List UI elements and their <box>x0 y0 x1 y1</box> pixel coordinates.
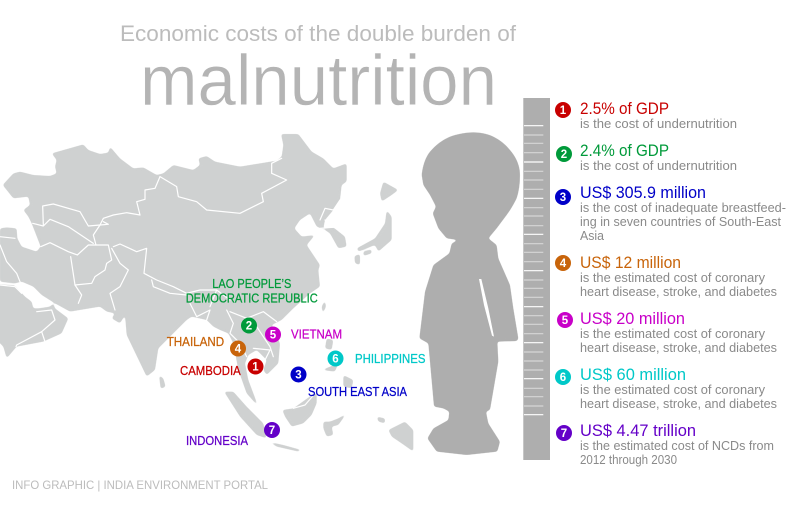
list item 4: US$ 12 million <box>580 254 681 272</box>
map marker 2 <box>241 318 257 334</box>
map label: South East Asia: SOUTH EAST ASIA <box>308 385 408 399</box>
list item 6: US$ 60 million <box>580 366 686 384</box>
map marker 4 <box>230 340 246 356</box>
map marker 7 <box>264 422 280 438</box>
map marker 5 <box>265 326 281 342</box>
main title word: malnutrition <box>140 42 497 121</box>
footer credit: INFO GRAPHIC | INDIA ENVIRONMENT PORTAL <box>12 478 268 492</box>
list item 4: 4 <box>560 258 567 270</box>
list item 1 <box>555 100 737 131</box>
map marker 6 <box>328 350 344 366</box>
list item 6: 6 <box>560 372 566 384</box>
list item 7: US$ 4.47 trillion <box>580 422 696 440</box>
list item 1: is the cost of undernutrition <box>580 117 737 131</box>
map marker 1 <box>248 358 264 374</box>
list item 7: 7 <box>561 428 567 440</box>
list item 3: 3 <box>560 192 566 204</box>
list item 6: is the estimated cost of coronary <box>580 383 766 397</box>
child silhouette <box>419 132 520 455</box>
subtitle line: Economic costs of the double burden of <box>120 21 517 46</box>
list item 5: is the estimated cost of coronary <box>580 327 766 341</box>
list item 3 <box>555 184 786 243</box>
list item 2 <box>556 142 737 173</box>
map marker 3 <box>290 366 306 382</box>
list item 7 <box>556 422 774 467</box>
list item 3: US$ 305.9 million <box>580 184 706 202</box>
list item 5: heart disease, stroke, and diabetes <box>580 341 777 355</box>
map marker 6: 6 <box>332 354 339 366</box>
list item 6: heart disease, stroke, and diabetes <box>580 397 777 411</box>
list item 1: 1 <box>560 105 567 117</box>
map label: Indonesia: INDONESIA <box>186 434 249 448</box>
list item 5: 5 <box>562 315 569 327</box>
list item 5 <box>557 310 777 355</box>
title <box>120 21 517 121</box>
map marker 4: 4 <box>235 344 242 356</box>
map label: Lao <box>186 277 318 306</box>
map label: Lao: DEMOCRATIC REPUBLIC <box>186 292 318 306</box>
list item 2: 2 <box>561 149 567 161</box>
list item 5: US$ 20 million <box>580 310 685 328</box>
map marker 2: 2 <box>246 321 252 333</box>
map label: Thailand: THAILAND <box>167 335 224 349</box>
list item 3: ing in seven countries of South-East <box>580 215 782 229</box>
list item 4: is the estimated cost of coronary <box>580 271 766 285</box>
height ruler <box>523 98 550 460</box>
map marker 7: 7 <box>269 425 275 437</box>
list item 3: Asia <box>580 229 604 243</box>
list item 2: 2.4% of GDP <box>580 142 669 160</box>
list item 6 <box>555 366 777 411</box>
list item 1: 2.5% of GDP <box>580 100 669 118</box>
list item 2: is the cost of undernutrition <box>580 159 737 173</box>
map marker 1: 1 <box>252 362 259 374</box>
list item 3: is the cost of inadequate breastfeed- <box>580 201 786 215</box>
map label: Philippines: PHILIPPINES <box>355 352 426 366</box>
map marker 3: 3 <box>295 370 302 382</box>
map of Asia <box>0 134 413 452</box>
list item 7: 2012 through 2030 <box>580 453 677 467</box>
map label: Cambodia: CAMBODIA <box>180 364 241 378</box>
list item 4: heart disease, stroke, and diabetes <box>580 285 777 299</box>
map label: Vietnam: VIETNAM <box>291 328 342 342</box>
map marker 5: 5 <box>270 330 277 342</box>
map label: Lao: LAO PEOPLE’S <box>212 277 291 291</box>
list item 7: is the estimated cost of NCDs from <box>580 439 774 453</box>
list item 4 <box>555 254 777 299</box>
